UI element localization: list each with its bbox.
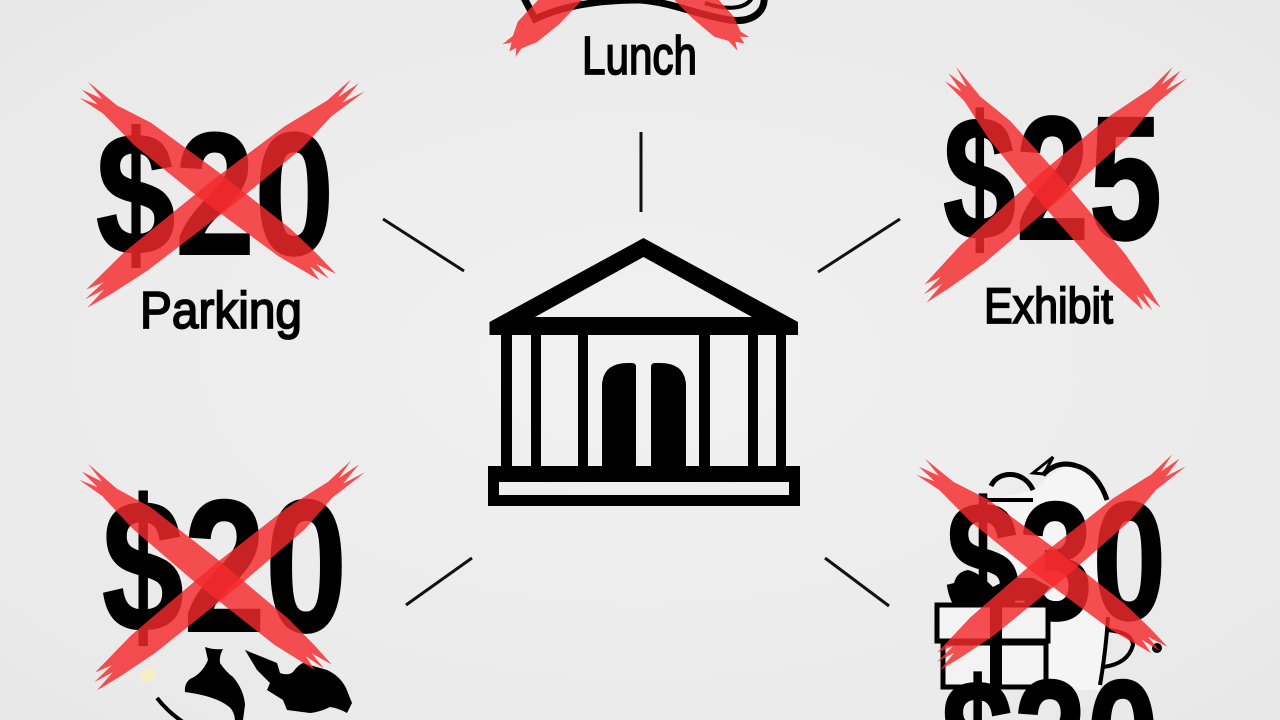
red cross: exhibit [912, 60, 1192, 323]
icon: abstract silhouettes [157, 647, 352, 720]
item: exhibit [912, 60, 1192, 334]
highlight spot [141, 668, 155, 682]
icon: gift box [937, 570, 1050, 687]
connector: upper right [818, 219, 900, 272]
label: parking: Parking [140, 282, 302, 340]
connector: lower left [406, 558, 472, 605]
red cross: lower left [73, 454, 370, 698]
connector: top [640, 132, 642, 212]
price: exhibit: $25 [943, 81, 1162, 277]
red cross: parking [73, 72, 370, 315]
price: parking: $20 [96, 96, 334, 291]
label: lunch: Lunch [582, 26, 697, 86]
icon: museum building [488, 238, 800, 506]
item: parking [73, 72, 370, 340]
connector: lower right [825, 558, 889, 606]
icon: apple and mug [980, 457, 1162, 690]
item: lower right [910, 448, 1191, 720]
red cross: lower right [910, 448, 1191, 677]
price: lower right: $30 [946, 467, 1166, 655]
item: lunch [502, 0, 768, 76]
label: exhibit: Exhibit [984, 278, 1113, 334]
red cross: lunch [502, 0, 749, 56]
icon: lunch plate [523, 0, 764, 20]
connector: upper left [383, 219, 464, 271]
item: lower left [73, 454, 370, 720]
price: lower left: $20 [102, 461, 347, 671]
